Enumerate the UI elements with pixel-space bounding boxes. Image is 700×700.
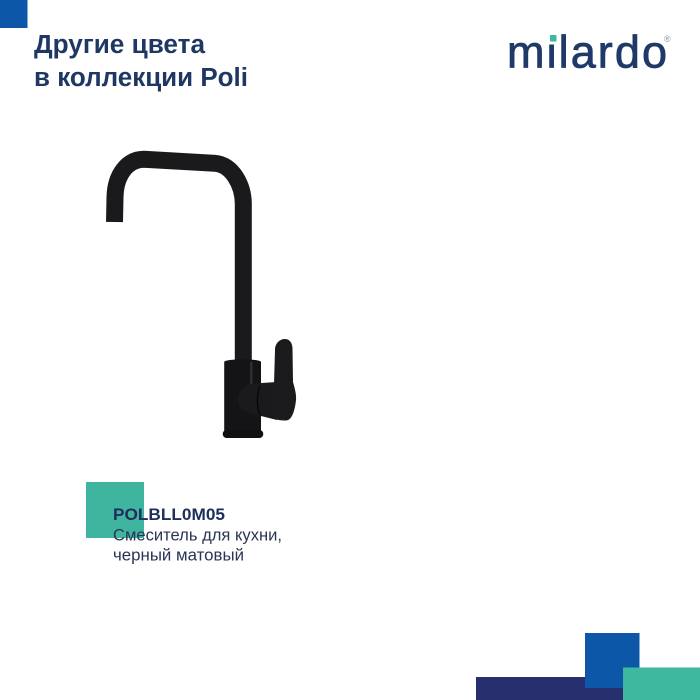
faucet illustration xyxy=(114,159,296,438)
faucet body highlight xyxy=(250,362,252,384)
faucet lever handle xyxy=(273,339,296,420)
title: Другие цвета xyxy=(34,31,206,59)
decoration: top-left blue square xyxy=(0,0,28,28)
connector seam xyxy=(257,386,260,415)
faucet lever connector xyxy=(238,382,277,420)
faucet body xyxy=(224,359,261,432)
title: в коллекции Poli xyxy=(34,64,248,92)
decoration: bottom-right blocks xyxy=(476,633,700,700)
accent: teal square behind product label xyxy=(86,482,144,538)
faucet base xyxy=(223,430,263,438)
faucet spout and riser xyxy=(114,159,243,362)
logo: milardo: milardo xyxy=(507,26,667,78)
product code: POLBLL0M05 xyxy=(113,505,225,524)
product label: черный матовый xyxy=(113,546,244,564)
title xyxy=(34,31,248,92)
logo: milardo: ® xyxy=(664,34,671,44)
product description: Смеситель для кухни, xyxy=(113,526,282,544)
product label xyxy=(113,505,282,564)
